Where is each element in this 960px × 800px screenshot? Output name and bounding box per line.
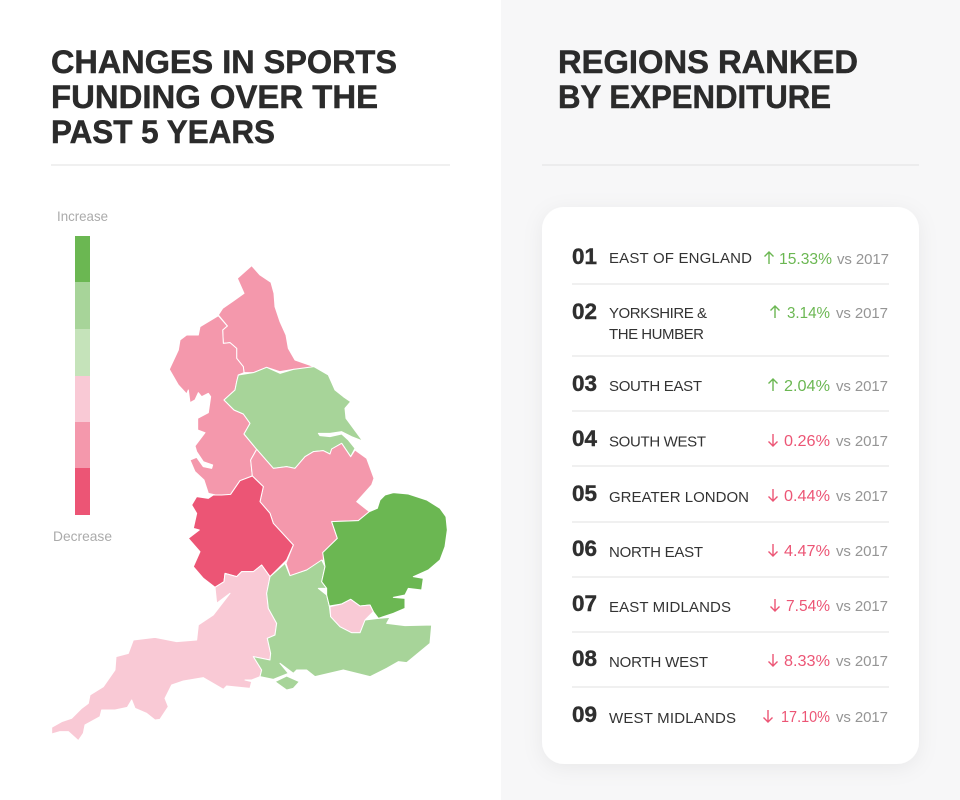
row 04 [572, 426, 888, 451]
legend: colour scale: Increase [57, 208, 108, 224]
row 07: EAST MIDLANDS [609, 599, 731, 616]
row 07: 07 [572, 591, 597, 616]
row 08: NORTH WEST [609, 654, 708, 671]
row 02: YORKSHIRE & [609, 305, 707, 322]
region: Isle of Wight [275, 676, 299, 690]
row 01: EAST OF ENGLAND [609, 250, 752, 267]
row 08 [572, 646, 888, 671]
row 02: THE HUMBER [609, 326, 704, 343]
row 09 [572, 702, 888, 727]
row 03: SOUTH EAST [609, 378, 702, 395]
row 09: 17.10% [781, 709, 830, 726]
row 08: vs 2017 [836, 653, 888, 670]
row 04: 04 [572, 426, 598, 451]
row 07: vs 2017 [836, 598, 888, 615]
row 05: vs 2017 [836, 488, 888, 505]
title: regions ranked: BY EXPENDITURE [558, 79, 831, 115]
row 06: NORTH EAST [609, 544, 703, 561]
row 01 [572, 244, 889, 269]
legend: colour scale [53, 208, 112, 544]
row 04: vs 2017 [836, 433, 888, 450]
legend: colour scale: Decrease [53, 528, 112, 544]
region: Yorkshire and the Humber [224, 367, 363, 468]
row 02: 02 [572, 299, 597, 324]
right panel background [501, 0, 960, 800]
title: changes in sports funding: PAST 5 YEARS [51, 114, 275, 150]
row 03 [572, 371, 888, 396]
region: West Midlands [188, 476, 293, 587]
row 08: 8.33% [784, 653, 830, 670]
row 04: 0.26% [784, 433, 830, 450]
region: North East [218, 266, 314, 373]
row 05 [572, 481, 888, 506]
row 03: vs 2017 [836, 378, 888, 395]
row 09: 09 [572, 702, 597, 727]
title: changes in sports funding [51, 44, 397, 150]
row 06: 06 [572, 536, 597, 561]
row 06: vs 2017 [836, 543, 888, 560]
region: East Midlands [251, 443, 374, 576]
region: South West [52, 565, 277, 741]
row 08: 08 [572, 646, 597, 671]
region: North West [169, 316, 257, 496]
region: Greater London [330, 599, 373, 633]
row 02: vs 2017 [836, 305, 888, 322]
region: East of England [322, 493, 447, 618]
title: changes in sports funding: CHANGES IN SPORTS [51, 44, 397, 80]
row 01: 15.33% [779, 251, 832, 268]
title: regions ranked: REGIONS RANKED [558, 44, 858, 80]
title: regions ranked [558, 44, 858, 115]
row 05: 0.44% [784, 488, 830, 505]
row 03: 2.04% [784, 378, 830, 395]
row 02 [572, 299, 888, 343]
row 04: SOUTH WEST [609, 434, 706, 450]
region: South East [253, 560, 432, 679]
row 06: 4.47% [784, 543, 830, 560]
row 01: vs 2017 [837, 251, 889, 268]
ranking card [542, 207, 919, 764]
title: changes in sports funding: FUNDING OVER THE [51, 79, 378, 115]
row 07: 7.54% [786, 598, 830, 615]
map of England [52, 266, 447, 741]
row 05: 05 [572, 481, 597, 506]
row 05: GREATER LONDON [609, 489, 749, 506]
row 07 [572, 591, 888, 616]
row 06 [572, 536, 888, 561]
row 09: WEST MIDLANDS [609, 710, 736, 727]
row 09: vs 2017 [836, 709, 888, 726]
row 01: 01 [572, 244, 597, 269]
row 02: 3.14% [787, 305, 830, 322]
row 03: 03 [572, 371, 597, 396]
